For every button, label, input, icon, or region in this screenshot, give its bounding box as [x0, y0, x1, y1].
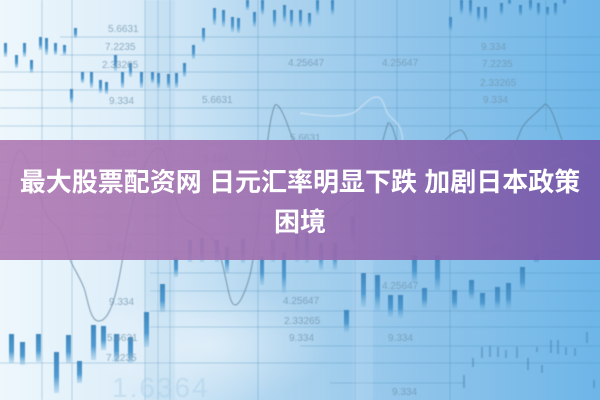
dark trend curve: [0, 104, 562, 321]
faint data labels: 9.334: [111, 149, 136, 160]
faint data labels: 9.334: [107, 242, 132, 253]
faint data labels: 2.33265: [284, 316, 321, 327]
faint data labels: 7.2235: [105, 42, 136, 53]
faint data labels: 2.33265: [480, 78, 517, 89]
faint data labels: 7.2235: [106, 353, 137, 364]
faint data labels: 2.33265: [102, 60, 139, 71]
faint data labels: 9.334: [388, 333, 413, 344]
faint data labels: 7.2235: [482, 59, 513, 70]
title: 困境: [274, 207, 326, 237]
faint data labels: 5.6631: [107, 333, 138, 344]
faint data labels: 4.25647: [382, 281, 419, 292]
faint data labels: 9.334: [289, 333, 314, 344]
faint data labels: 7.2235: [200, 191, 231, 202]
faint data labels: 5.6631: [202, 95, 233, 106]
faint data labels: 5.6631: [480, 224, 511, 235]
faint data labels: 9.334: [109, 297, 134, 308]
faint data labels: 9.334: [483, 95, 508, 106]
faint data labels: 4.25647: [283, 296, 320, 307]
faint data labels: 5.6631: [290, 133, 321, 144]
faint data labels: 2.33265: [477, 207, 514, 218]
small bars lower right: [463, 332, 595, 388]
title: 最大股票配资网 日元汇率明显下跌 加剧日本政策: [20, 167, 580, 197]
faint data labels: 4.25647: [288, 58, 325, 69]
title band: [0, 140, 600, 260]
faint data labels: 9.334: [481, 42, 506, 53]
faint data labels: [102, 24, 517, 398]
faint data labels: 9.334: [482, 242, 507, 253]
faint data labels: 9.334: [203, 153, 228, 164]
title: [20, 167, 580, 237]
light trend curve: [300, 97, 600, 170]
faint data labels: 9.334: [109, 96, 134, 107]
faint data labels: 9.334: [392, 387, 417, 398]
faint data labels: 4.25647: [382, 58, 419, 69]
faint data labels: 2.33265: [198, 173, 235, 184]
faint data labels: 5.6631: [108, 24, 139, 35]
